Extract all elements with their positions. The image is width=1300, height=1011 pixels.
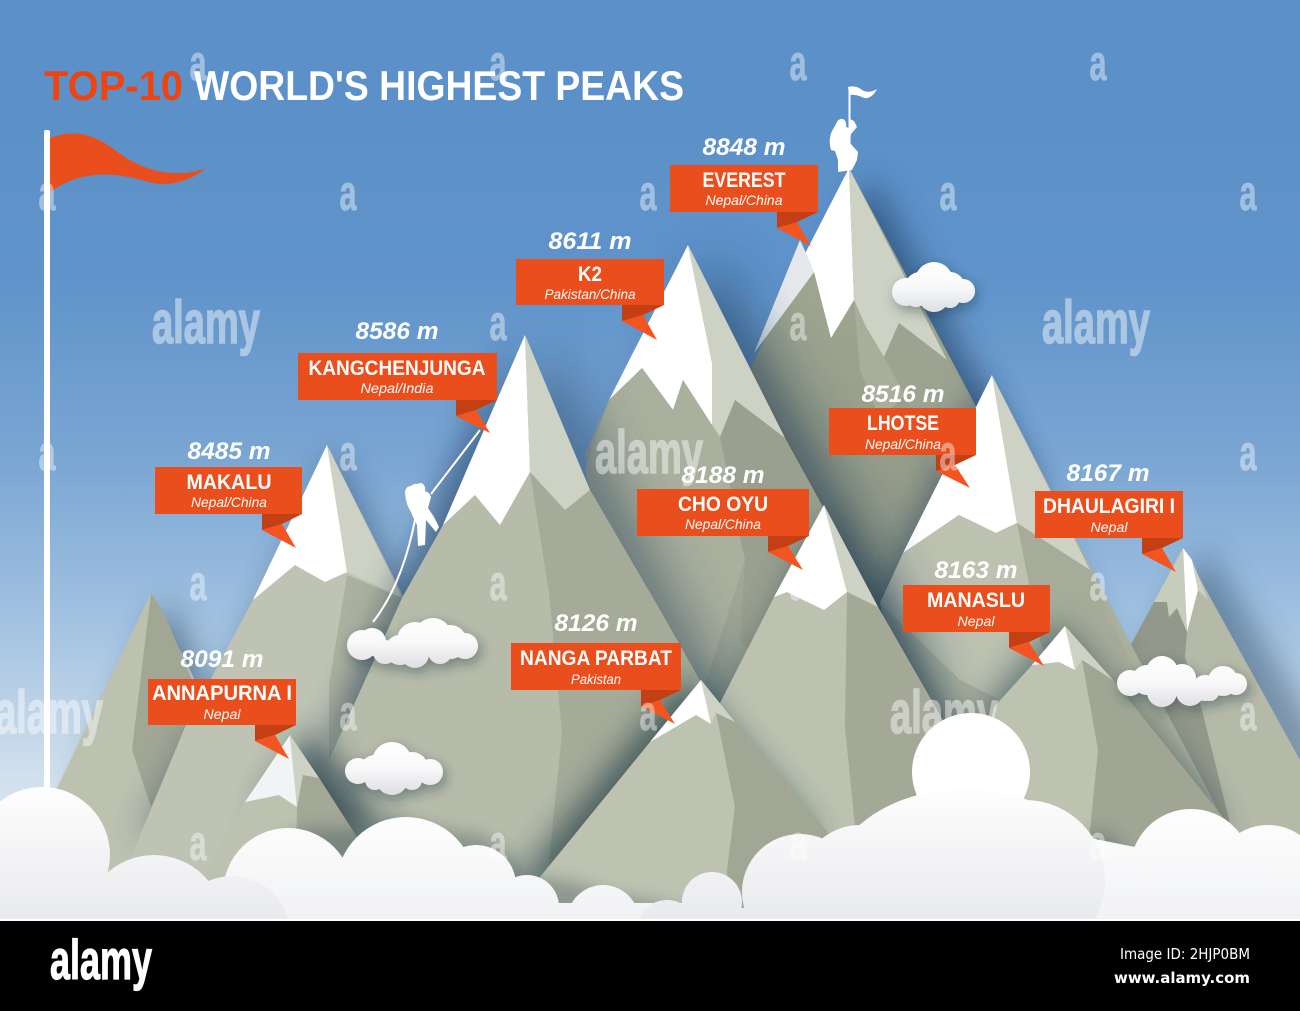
watermarks: a [190,35,207,91]
watermarks [0,35,1257,871]
label: Everest: Nepal/China [706,192,783,208]
label: Manaslu: 8163 m [934,557,1018,584]
label: Dhaulagiri I: DHAULAGIRI I [1043,495,1175,518]
mountain: Everest [735,168,1062,700]
watermarks: a [1090,815,1107,871]
title [44,62,684,109]
footer bar: www.alamy.com [1114,969,1250,987]
label: Kangchenjunga [298,318,497,433]
label: Cho Oyu: CHO OYU [678,493,768,516]
watermarks: alamy [1042,289,1150,356]
watermarks: a [190,815,207,871]
watermarks: a [190,555,207,611]
label: K2 [516,228,664,340]
label: Makalu [155,438,302,548]
watermarks: a [38,425,56,481]
label: Lhotse [829,381,976,488]
watermarks: a [790,295,807,351]
label: Dhaulagiri I [1035,460,1183,572]
label: Kangchenjunga: 8586 m [356,318,438,345]
label: Makalu: 8485 m [188,438,270,465]
mountain: Kangchenjunga [300,335,790,921]
title: TOP-10 [44,62,183,109]
watermarks: a [940,165,957,221]
label: K2: K2 [578,263,602,286]
mountain: Annapurna I [200,729,387,880]
watermarks: a [1240,685,1257,741]
mountain: Lhotse [856,375,1218,860]
label: Nanga Parbat: 8126 m [554,610,638,637]
watermarks: a [640,165,657,221]
label: K2: Pakistan/China [544,286,636,302]
label: Dhaulagiri I: 8167 m [1066,460,1150,487]
watermarks: a [790,35,807,91]
label: Lhotse: Nepal/China [865,436,941,452]
mountain: far-right peak [1090,548,1300,900]
footer bar: alamy [50,928,152,991]
label: Annapurna I: 8091 m [180,646,264,673]
label: Cho Oyu [637,462,809,570]
label: Annapurna I: ANNAPURNA I [152,682,292,705]
mountain: far-left peak [56,593,230,900]
label: Lhotse: 8516 m [862,381,944,408]
cloud: right of Everest [892,262,975,312]
watermarks: a [490,815,507,871]
mountain: K2 [585,245,956,794]
label: Everest [670,134,818,246]
mountain: Nanga Parbat [514,676,830,921]
watermarks: alamy [890,679,998,746]
watermarks: a [790,555,807,611]
watermarks: a [1090,555,1107,611]
watermarks: a [1240,425,1257,481]
label: Annapurna I: Nepal [204,706,241,722]
label: Manaslu: MANASLU [927,589,1025,612]
label: Everest: 8848 m [702,134,786,161]
footer bar [0,919,1300,1011]
mountain: Makalu [130,445,478,900]
watermarks: a [340,165,357,221]
rope and climber on Kangchenjunga [373,430,480,622]
watermarks: a [490,35,507,91]
watermarks: a [790,815,807,871]
label: Kangchenjunga: KANGCHENJUNGA [308,357,486,380]
label: Lhotse: LHOTSE [867,412,939,435]
label: Annapurna I [148,646,296,759]
watermarks: alamy [0,679,103,746]
label: Dhaulagiri I: Nepal [1090,519,1128,535]
watermarks: alamy [595,419,703,486]
label: Nanga Parbat: Pakistan [571,671,621,687]
climber with flag on Everest [830,86,877,172]
label: Nanga Parbat: NANGA PARBAT [520,647,672,670]
watermarks: a [940,425,957,481]
label: Manaslu [903,557,1050,666]
mountain: Cho Oyu [690,505,1040,880]
watermarks: alamy [152,289,260,356]
label: Everest: EVEREST [702,169,786,192]
label: Nanga Parbat [511,610,681,724]
label: Cho Oyu: Nepal/China [685,516,761,532]
cloud: near climber [347,618,478,668]
mountain: Manaslu [944,620,1225,860]
watermarks: a [1240,165,1257,221]
watermarks: a [38,165,56,221]
title: WORLD'S HIGHEST PEAKS [194,62,684,109]
watermarks: a [1090,35,1107,91]
foreground clouds [0,713,1300,995]
footer bar: Image ID: 2HJP0BM [1120,945,1250,963]
watermarks: a [340,685,357,741]
watermarks: a [490,295,507,351]
label: K2: 8611 m [548,228,632,255]
watermarks: a [490,555,507,611]
label: Makalu: MAKALU [186,471,272,494]
cloud: far right [1117,656,1247,707]
watermarks: a [340,425,357,481]
cloud: lower mid [345,742,443,795]
flag on white pole [44,130,206,790]
watermarks: a [640,685,657,741]
label: Cho Oyu: 8188 m [682,462,764,489]
label: Kangchenjunga: Nepal/India [360,380,434,396]
label: Manaslu: Nepal [958,613,995,629]
label: Makalu: Nepal/China [191,494,267,510]
